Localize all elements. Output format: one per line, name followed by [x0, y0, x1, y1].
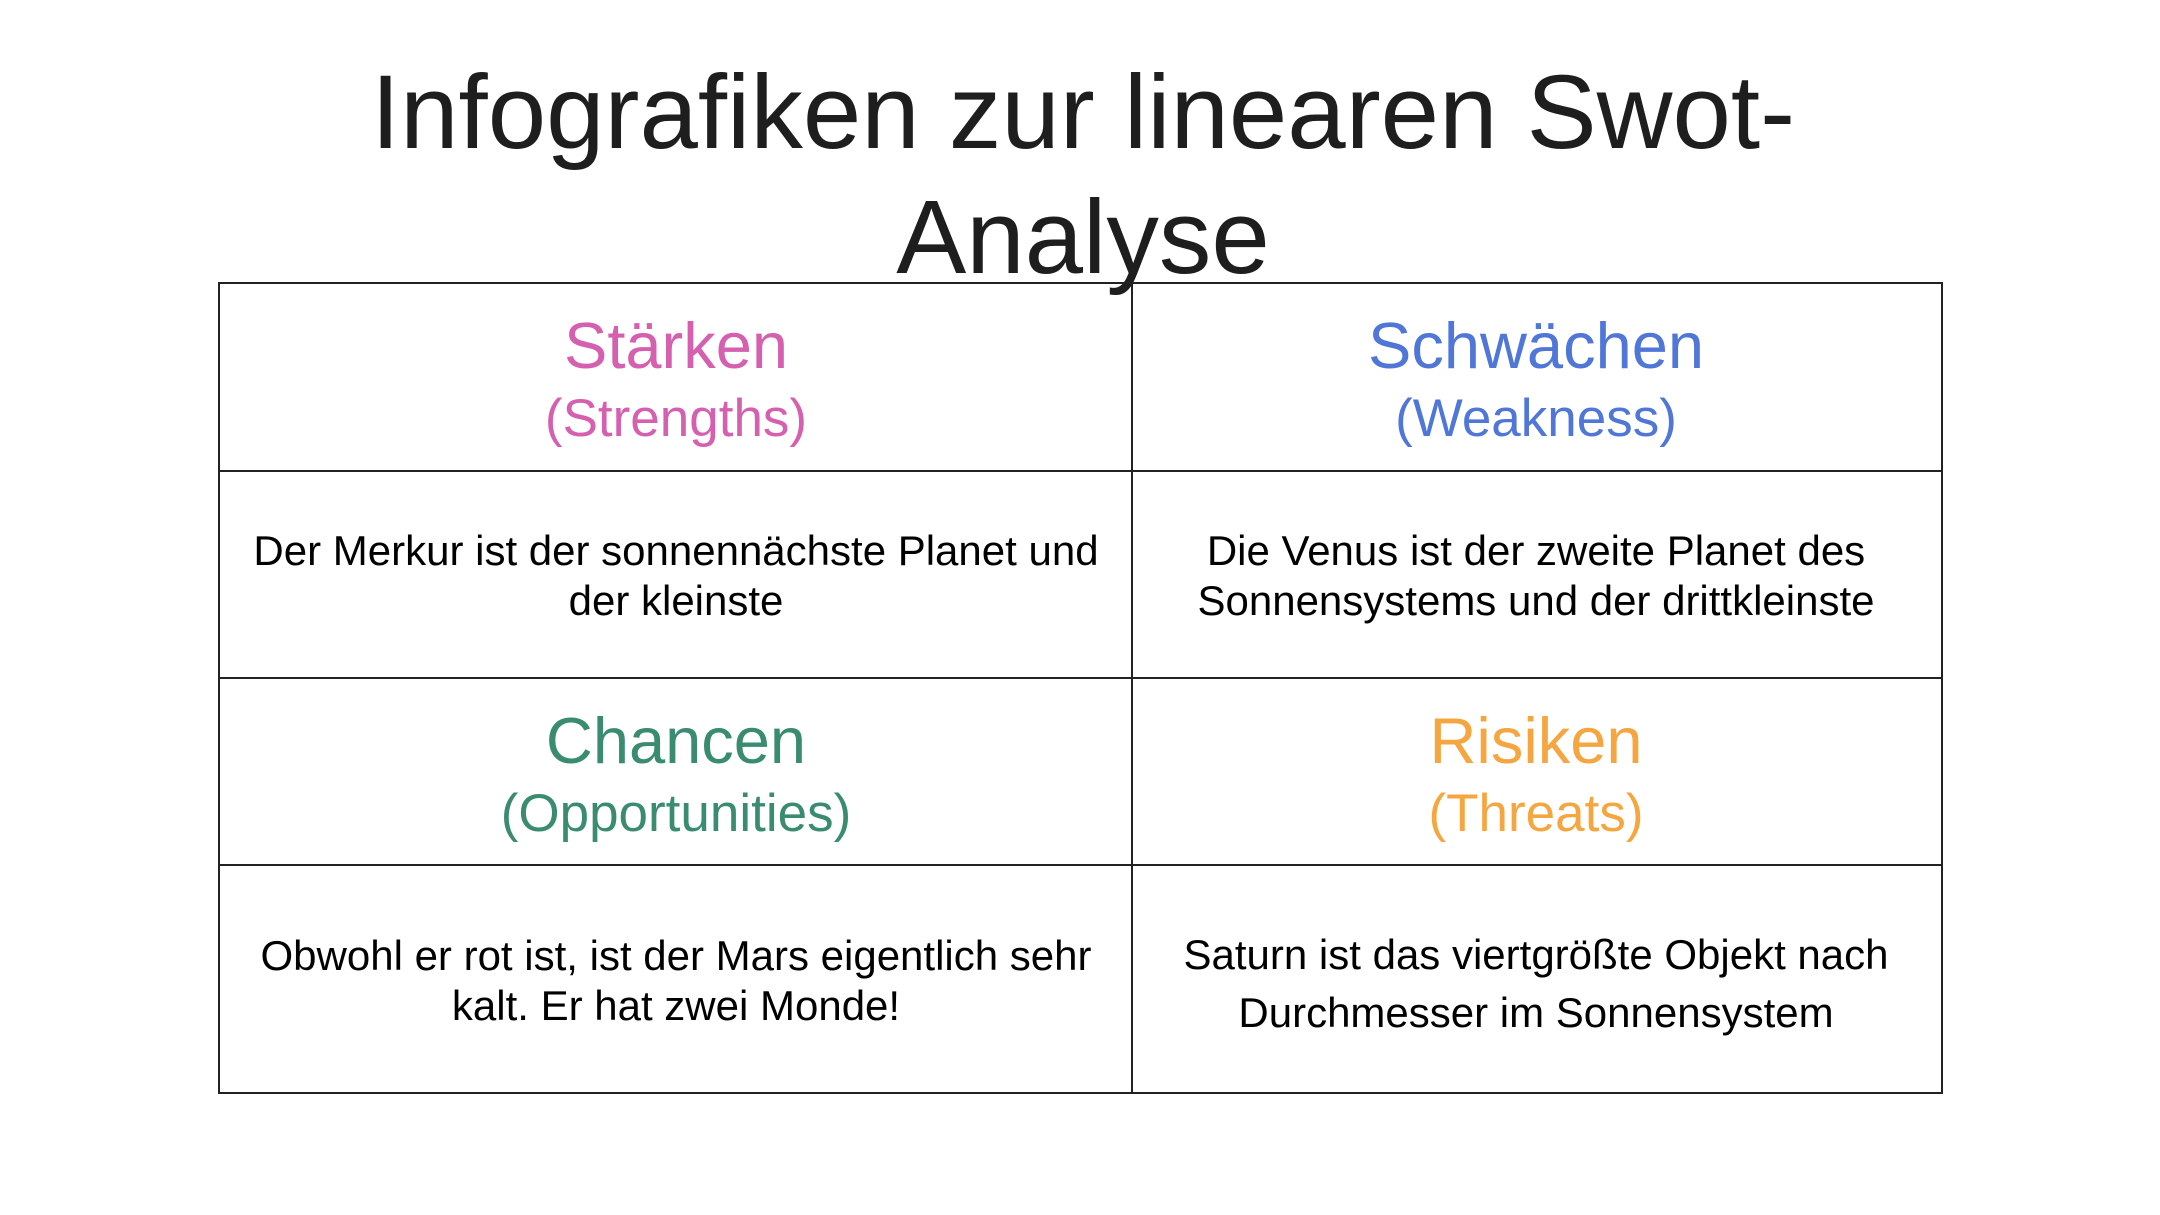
text: opportunities: kalt. Er hat zwei Monde!	[452, 982, 900, 1029]
header: threats: (Threats)	[1428, 784, 1643, 843]
header: strengths: (Strengths)	[545, 389, 807, 448]
header: opportunities	[501, 704, 851, 843]
text: strengths: der kleinste	[569, 577, 783, 624]
text: strengths: Der Merkur ist der sonnennächste Planet und	[253, 527, 1099, 574]
header: threats: Risiken	[1429, 704, 1643, 777]
text: weaknesses: Sonnensystems und der drittkleinste	[1197, 577, 1875, 624]
header: threats	[1428, 704, 1643, 843]
title: Infografiken zur linearen Swot-	[371, 54, 1795, 171]
text: strengths	[253, 527, 1099, 624]
text: opportunities: Obwohl er rot ist, ist der Mars eigentlich sehr	[260, 932, 1091, 979]
header: strengths: Stärken	[564, 309, 788, 382]
title	[371, 54, 1795, 296]
header: strengths	[545, 309, 807, 448]
header: opportunities: (Opportunities)	[501, 784, 851, 843]
text: opportunities	[260, 932, 1091, 1029]
text: threats: Durchmesser im Sonnensystem	[1238, 989, 1834, 1036]
title: Analyse	[896, 179, 1270, 296]
text: weaknesses: Die Venus ist der zweite Planet des	[1207, 527, 1865, 574]
table grid	[218, 282, 1943, 1094]
header: weaknesses: Schwächen	[1368, 309, 1704, 382]
header: weaknesses: (Weakness)	[1395, 389, 1677, 448]
text: threats	[1184, 931, 1888, 1036]
text: weaknesses	[1197, 527, 1875, 624]
header: opportunities: Chancen	[546, 704, 806, 777]
text: threats: Saturn ist das viertgrößte Objekt nach	[1184, 931, 1888, 978]
header: weaknesses	[1368, 309, 1704, 448]
